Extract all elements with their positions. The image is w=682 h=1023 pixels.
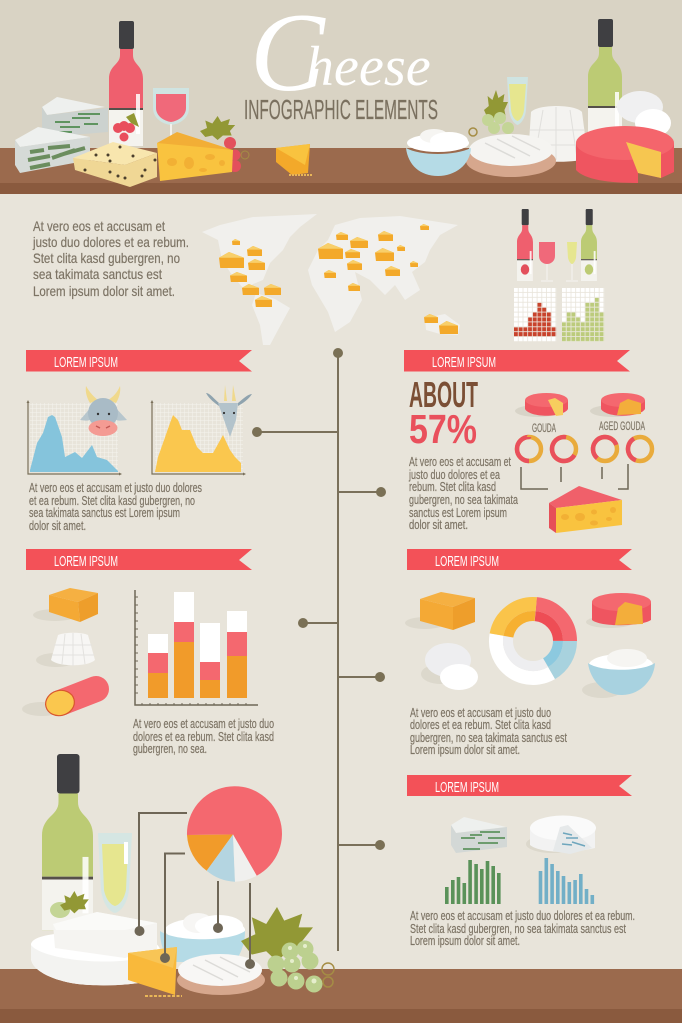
text: about paragraph: dolor sit amet. [409, 518, 468, 532]
icon: gouda wheel [515, 393, 568, 417]
icon: blue cheese upper [42, 97, 108, 137]
panel: bar chart [22, 549, 274, 756]
pie connectors [134, 813, 255, 969]
text: milk paragraph: At vero eos et accusam et justo duo dolores [29, 481, 202, 495]
icon: goat [206, 385, 252, 437]
icon: pepper cheese [73, 142, 157, 187]
label: aged gouda: AGED GOUDA [599, 419, 645, 433]
banner: heading: LOREM IPSUM [432, 354, 496, 371]
text: about paragraph: justo duo dolores et ea [408, 468, 500, 482]
banner: heading: LOREM IPSUM [435, 779, 499, 796]
text: milk paragraph: sea takimata sanctus est Lorem ipsum [29, 506, 180, 520]
text: donut paragraph: dolores et ea rebum. Stet clita kasd [410, 718, 551, 732]
icon: cream bowl [406, 129, 471, 176]
icon: mozzarella [617, 91, 671, 137]
text: milk paragraph: dolor sit amet. [29, 519, 86, 533]
text: donut paragraph: gubergren, no sea takimata sanctus est [410, 731, 567, 745]
icon: large wedge [549, 486, 622, 533]
icon: cheddar cube [33, 588, 98, 622]
text: about paragraph: gubergren, no sea takimata [409, 493, 518, 507]
icon: green grapes with leaf [469, 90, 514, 136]
banner: heading: LOREM IPSUM [54, 354, 118, 371]
title: heese [306, 36, 431, 98]
icon: mozzarella [421, 643, 478, 690]
icon: rosé bottle [109, 21, 143, 146]
text: intro paragraph [32, 218, 189, 299]
icon: white wheel [526, 816, 596, 854]
wine comparison: bottles and glasses [517, 209, 597, 281]
pixel chart: red wine [514, 288, 556, 342]
map continents [202, 214, 460, 345]
text: intro paragraph: justo duo dolores et ea rebum. [32, 234, 189, 250]
banner: heading: LOREM IPSUM [435, 553, 499, 570]
connectors [521, 464, 628, 489]
heading: about: ABOUT [409, 374, 478, 415]
number: 57%: 57% [409, 406, 477, 452]
icon: grape leaf and red grapes [200, 116, 249, 172]
panel: blue cheese bars [407, 775, 635, 948]
text: bar chart paragraph: dolores et ea rebum. Stet clita kasd [133, 730, 274, 744]
icon: cheddar cube [405, 592, 475, 630]
ring charts [517, 432, 655, 466]
text: bar chart paragraph: At vero eos et accusam et justo duo [133, 717, 274, 731]
icon: cream bowl [582, 649, 655, 698]
chart: green bars [445, 860, 501, 904]
text: intro paragraph: Stet clita kasd gubergren, no [33, 250, 180, 266]
text: bar chart paragraph [133, 717, 274, 756]
icon: brie on board [466, 134, 556, 177]
icon: brie on board [177, 954, 265, 995]
pixel chart: white wine [562, 288, 604, 342]
text: intro paragraph: Lorem ipsum dolor sit amet. [33, 283, 175, 299]
chart: pie [187, 786, 282, 882]
illustration: top right cheeses and white wine [406, 19, 674, 183]
icon: flute [98, 833, 132, 913]
icon: bottle label grapes [50, 891, 89, 918]
banner: heading [407, 775, 632, 796]
banner: heading [404, 350, 630, 372]
icon: small flute [566, 242, 578, 281]
icon: red wheel [586, 593, 651, 628]
icon: flute [507, 77, 528, 125]
icon: camembert wheel and wedge [31, 912, 160, 985]
text: milk paragraph [29, 481, 202, 533]
world map with cheese markers [202, 214, 460, 345]
text: milk paragraph: et ea rebum. Stet clita kasd gubergren, no [29, 494, 195, 508]
icon: cow [80, 386, 127, 436]
illustration: top left cheeses and rosé wine [15, 21, 313, 187]
text: intro paragraph: sea takimata sanctus est [33, 266, 162, 282]
icon: small rosé glass [539, 242, 555, 281]
icon: rosé glass [153, 88, 189, 138]
chart: stacked bars [135, 590, 258, 705]
icon: white wine bottle [42, 754, 93, 930]
icon: yellow holed cheese [157, 132, 233, 181]
footer table [0, 969, 682, 1023]
header band [0, 0, 682, 194]
icon: blue cheese wedge [451, 817, 507, 853]
text: donut paragraph: Lorem ipsum dolor sit amet. [410, 743, 520, 757]
text: about paragraph: rebum. Stet clita kasd [409, 480, 496, 494]
icon: ricotta [528, 106, 588, 162]
illustration: bottom cheese board [31, 754, 334, 996]
text: blue cheese paragraph: Lorem ipsum dolor sit amet. [410, 934, 520, 948]
banner: heading [26, 549, 252, 570]
chart: goat area chart [150, 400, 246, 476]
icon: cream bowl [160, 913, 245, 962]
panel: about 57 percent [404, 350, 655, 533]
chart: donut [482, 590, 584, 692]
timeline [252, 348, 386, 951]
panel: milk charts [26, 350, 252, 533]
icon: small wedge with crumbs [276, 144, 313, 175]
label: gouda: GOUDA [532, 421, 556, 435]
icon: small white bottle [581, 209, 597, 281]
icon: small rosé bottle [517, 209, 533, 281]
text: bar chart paragraph: gubergren, no sea. [133, 742, 207, 756]
icon: cheddar wedge [128, 947, 182, 996]
banner: heading: LOREM IPSUM [54, 553, 118, 570]
icon: aged gouda wheel [590, 393, 645, 417]
icon: blue cheese lower [15, 127, 90, 173]
icon: red wheel [576, 126, 674, 183]
text: donut paragraph [410, 706, 567, 757]
chart: blue bars [539, 858, 594, 904]
banner: heading [26, 350, 252, 372]
text: about paragraph [408, 455, 518, 532]
icon: white wine bottle [588, 19, 622, 144]
icon: ricotta [36, 633, 95, 667]
chart: cow area chart [26, 400, 122, 476]
banner: heading [407, 549, 632, 570]
icon: grape bunch with leaf [241, 907, 334, 992]
cheese markers [219, 224, 458, 334]
text: intro paragraph: At vero eos et accusam et [33, 218, 165, 234]
text: blue cheese paragraph [410, 909, 635, 948]
text: about paragraph: At vero eos et accusam et [409, 455, 511, 469]
icon: salami [22, 687, 96, 719]
text: about paragraph: sanctus est Lorem ipsum [409, 506, 507, 520]
subtitle: INFOGRAPHIC ELEMENTS [244, 94, 438, 125]
panel: donut chart [405, 549, 655, 757]
text: donut paragraph: At vero eos et accusam et justo duo [410, 706, 551, 720]
